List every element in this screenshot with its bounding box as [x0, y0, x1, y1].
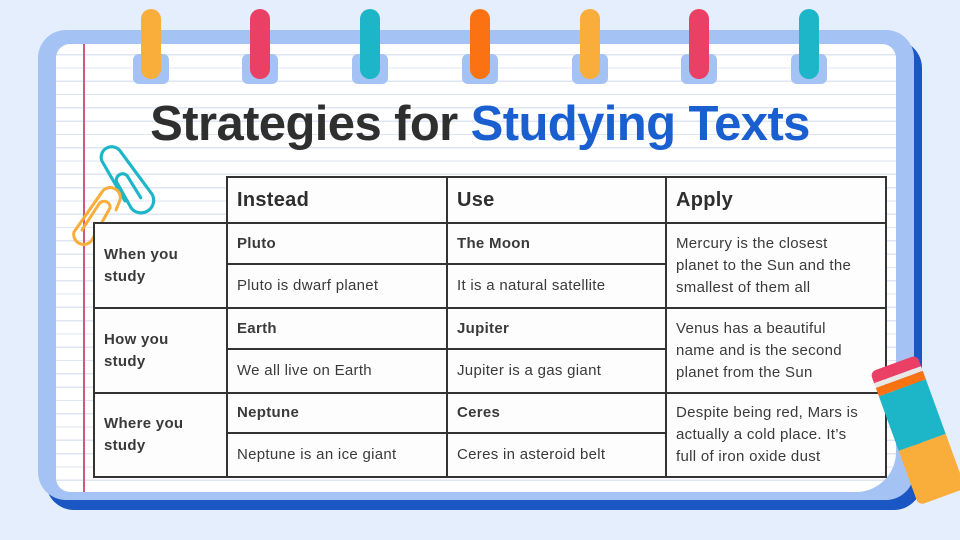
header row: The Moon: [457, 234, 530, 252]
header row: planet from the Sun: [676, 364, 813, 380]
notebook shadow: [46, 40, 922, 510]
header row: Jupiter: [457, 320, 509, 336]
binder tabs: [133, 54, 827, 84]
icon: paperclips: [72, 145, 156, 246]
header row: Jupiter is a gas giant: [457, 362, 601, 379]
paper: [56, 44, 896, 492]
header row: smallest of them all: [676, 278, 810, 296]
title: Strategies for Studying Texts: [150, 97, 810, 151]
header row: Ceres: [457, 404, 500, 421]
header row: When you: [104, 246, 178, 262]
header row: Neptune: [237, 404, 299, 421]
notebook cover: [38, 30, 914, 500]
header row: Venus has a beautiful: [676, 320, 826, 336]
header row: We all live on Earth: [237, 362, 372, 379]
header row: Pluto: [237, 234, 276, 252]
header row: actually a cold place. It’s: [676, 426, 846, 443]
header row: study: [104, 437, 146, 454]
header row: name and is the second: [676, 342, 842, 358]
header row: full of iron oxide dust: [676, 448, 820, 465]
header row: planet to the Sun and the: [676, 256, 851, 274]
header row: Neptune is an ice giant: [237, 446, 396, 463]
header row: study: [104, 268, 146, 284]
header row: Use: [457, 189, 495, 211]
table: [93, 176, 887, 478]
header row: Apply: [676, 189, 733, 211]
icon: eraser: [872, 356, 960, 504]
header row: Ceres in asteroid belt: [457, 446, 605, 463]
binder rings: [141, 9, 819, 79]
header row: Instead: [237, 189, 309, 211]
header row: study: [104, 352, 146, 370]
header row: How you: [104, 330, 169, 348]
header row: Pluto is dwarf planet: [237, 277, 378, 294]
header row: Where you: [104, 415, 183, 432]
header row: Mercury is the closest: [676, 234, 828, 252]
header row: Despite being red, Mars is: [676, 404, 858, 421]
header row: Earth: [237, 320, 277, 336]
header row: It is a natural satellite: [457, 277, 605, 294]
header row: [95, 187, 885, 468]
